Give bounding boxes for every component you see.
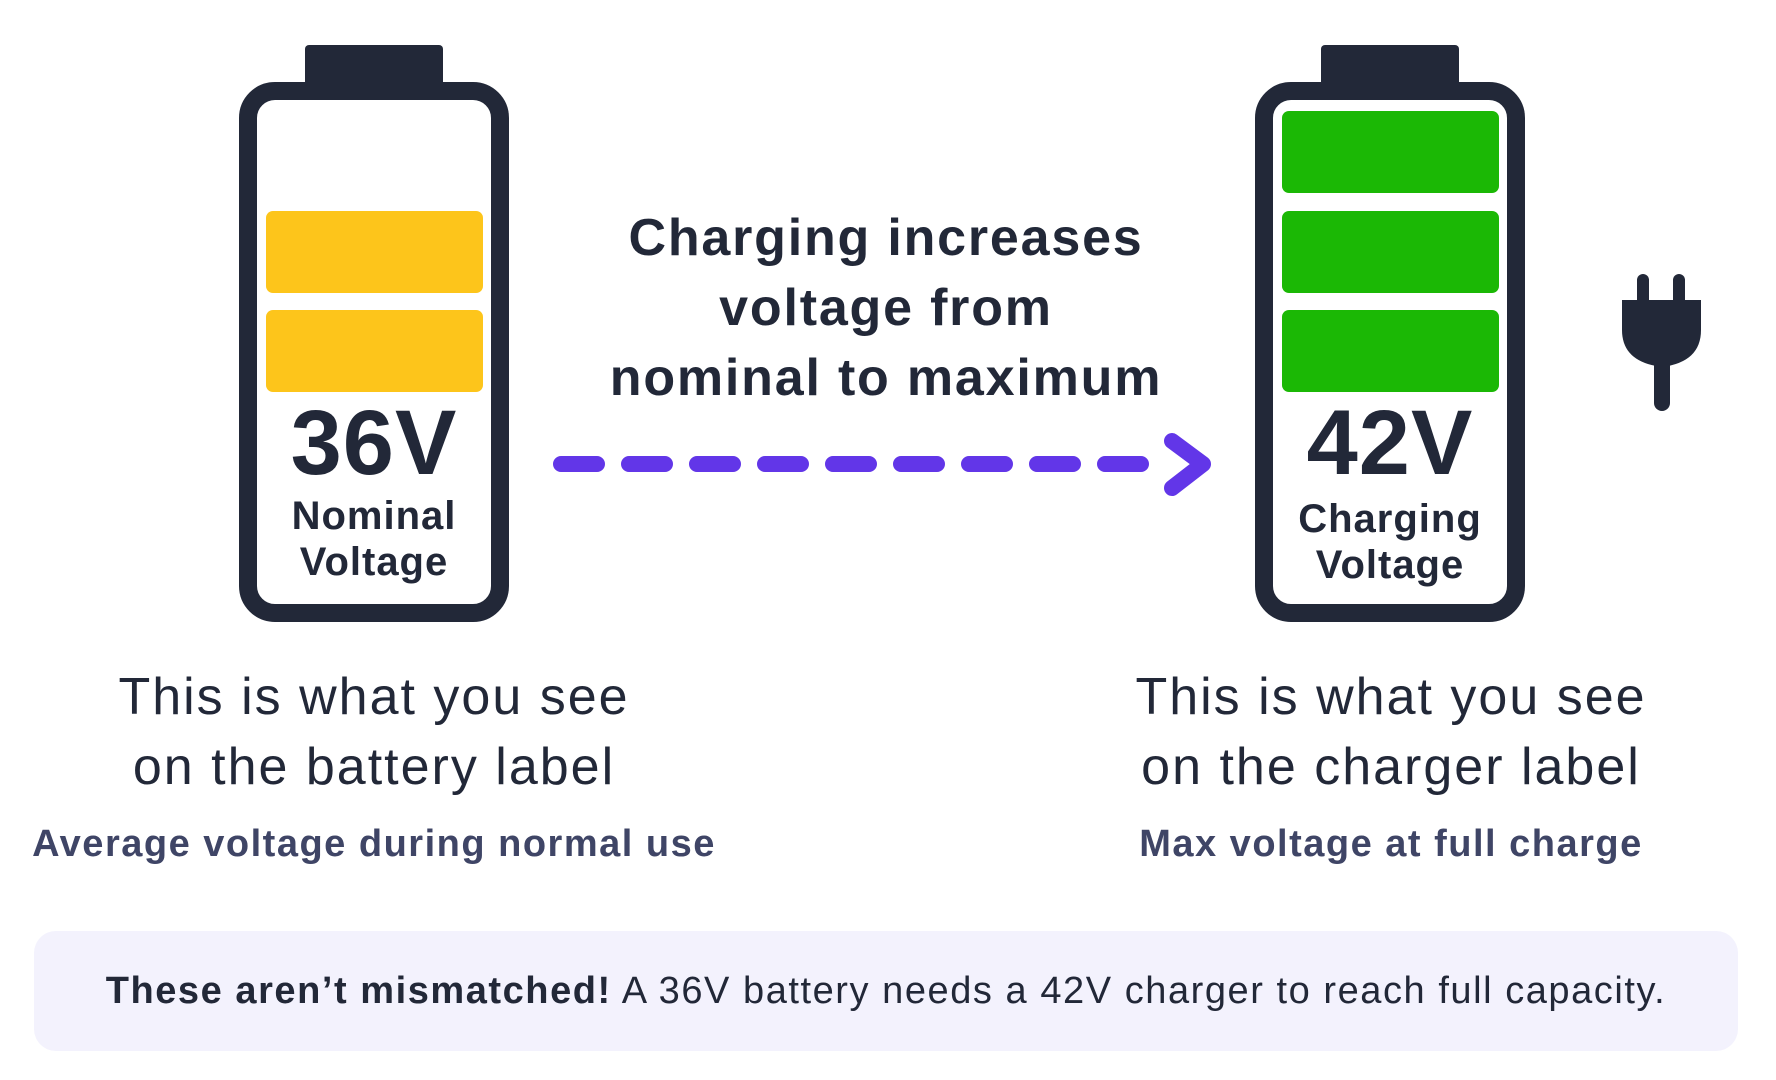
label: 36V: 36V [291,392,457,494]
heading: charging increases voltage: nominal to maximum [610,349,1162,407]
label: Charging Voltage: Voltage [1316,543,1464,587]
label: 42V: 42V [1307,392,1473,494]
battery: 36V nominal [239,45,509,622]
note: average voltage: Average voltage during normal use [32,823,716,865]
callout box: These aren’t mismatched! A 36V battery needs a 42V charger to reach full capacity. [106,970,1666,1012]
battery: 42V charging [1255,45,1525,622]
text: battery label [118,668,630,796]
text: battery label: on the battery label [133,738,615,796]
text: battery label: This is what you see [118,668,630,726]
label: Nominal Voltage: Nominal [292,494,456,538]
text: charger label: on the charger label [1141,738,1641,796]
yellow charge bars [266,211,483,392]
heading: charging increases voltage: voltage from [719,279,1053,337]
note: max voltage: Max voltage at full charge [1139,823,1643,865]
label: Nominal Voltage: Voltage [300,540,448,584]
text: charger label [1135,668,1647,796]
callout box [34,931,1738,1051]
icon: plug [1622,274,1701,411]
arrow: dashed [553,433,1211,496]
heading: charging increases voltage: Charging increases [628,209,1144,267]
text: charger label: This is what you see [1135,668,1647,726]
heading: charging increases voltage [610,209,1162,407]
label: Charging Voltage: Charging [1298,497,1482,541]
label: Charging Voltage [1298,497,1482,587]
label: Nominal Voltage [292,494,456,584]
green charge bars [1282,111,1499,392]
